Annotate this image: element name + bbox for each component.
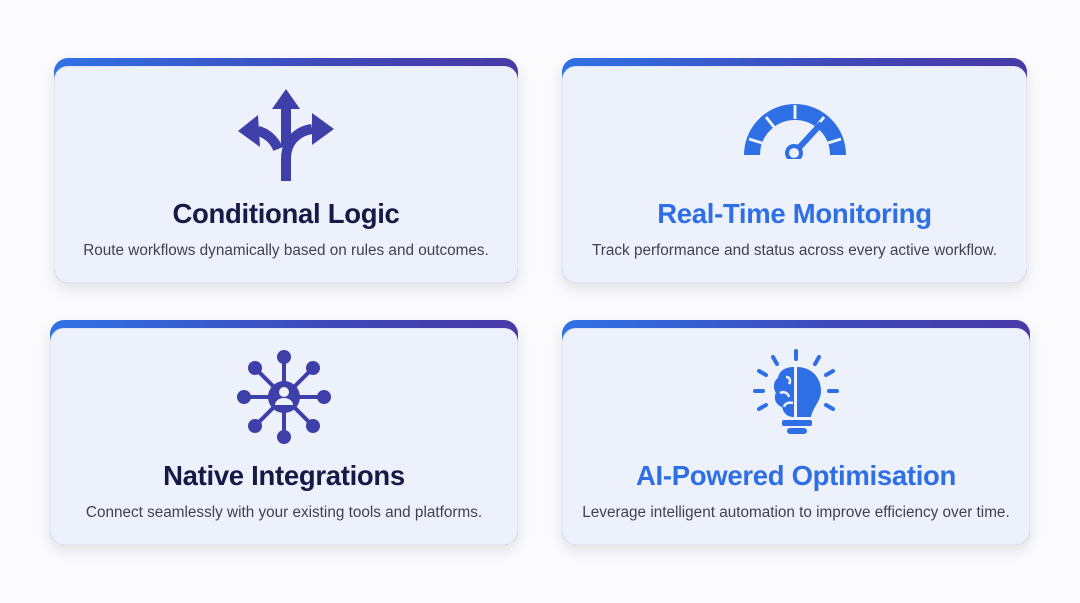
panel: conditional logic xyxy=(54,58,518,283)
icon: network hub xyxy=(237,350,331,444)
panel: ai-powered optimisation xyxy=(562,320,1030,545)
text block: Track performance and status across every active workflow. xyxy=(592,242,997,259)
panel: native integrations xyxy=(50,320,518,545)
heading: AI-Powered Optimisation xyxy=(636,460,956,491)
text block: Leverage intelligent automation to improve efficiency over time. xyxy=(582,504,1010,521)
icon: brain bulb xyxy=(753,349,839,434)
text block: Route workflows dynamically based on rules and outcomes. xyxy=(83,242,489,259)
icon: gauge xyxy=(744,104,846,159)
text block: Connect seamlessly with your existing tools and platforms. xyxy=(86,504,482,521)
panel: real-time monitoring xyxy=(562,58,1027,283)
heading: Native Integrations xyxy=(163,460,405,491)
heading: Conditional Logic xyxy=(172,198,400,229)
heading: Real-Time Monitoring xyxy=(657,198,932,229)
icon: split arrows xyxy=(238,89,334,181)
